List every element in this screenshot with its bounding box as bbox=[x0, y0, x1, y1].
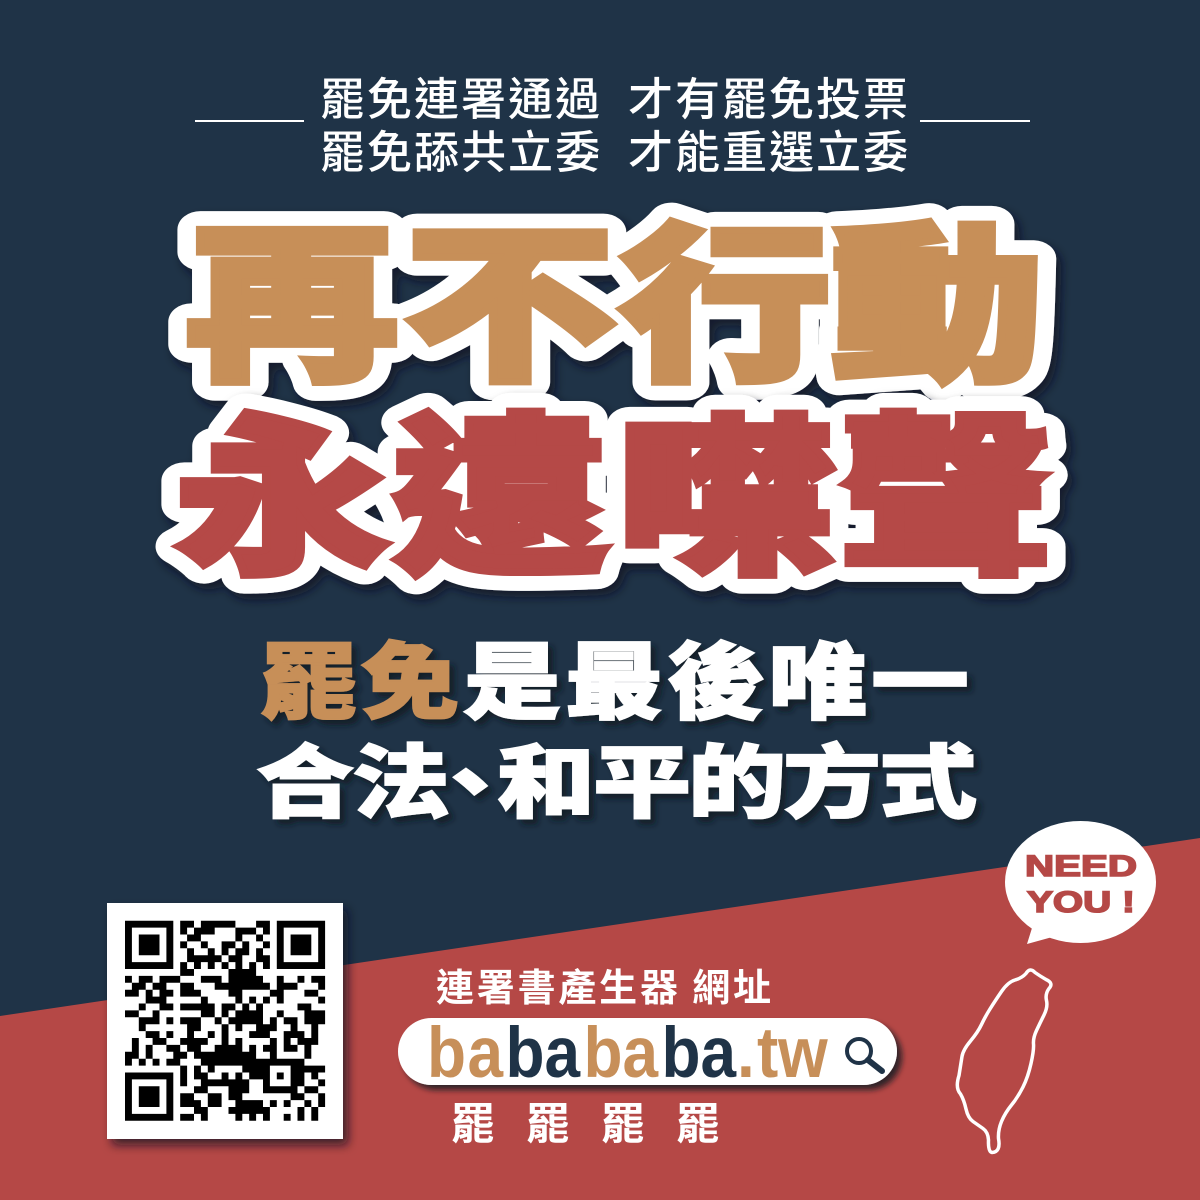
icon: magnifier bbox=[847, 1039, 882, 1071]
pill background bbox=[398, 1018, 897, 1085]
subtitle line 2: 和平的方式 bbox=[497, 718, 977, 834]
headline line 2: 永遠噤聲 bbox=[174, 359, 1054, 609]
repeated recall characters bbox=[451, 1088, 720, 1152]
repeated recall characters: 罷 bbox=[676, 1088, 720, 1152]
repeated recall characters: 罷 bbox=[526, 1088, 570, 1152]
QR code bbox=[107, 903, 343, 1139]
repeated recall characters: 罷 bbox=[451, 1088, 495, 1152]
red diagonal panel bbox=[0, 838, 1200, 1200]
headline line 2: 永遠噤聲 bbox=[174, 359, 1054, 609]
bubble text: YOU ! bbox=[1027, 886, 1135, 919]
icon: Taiwan outline bbox=[957, 970, 1051, 1152]
subtitle bbox=[256, 615, 977, 834]
repeated recall characters: 罷 bbox=[601, 1088, 645, 1152]
slogan line 1: 罷免連署通過 才有罷免投票 bbox=[320, 63, 908, 128]
url search bar bbox=[398, 1014, 897, 1093]
headline line 1: 再不行動 bbox=[186, 170, 1043, 415]
subtitle line 2: 合法 bbox=[256, 718, 450, 834]
bubble text bbox=[1025, 850, 1137, 919]
slogan line 2: 罷免舔共立委 才能重選立委 bbox=[320, 116, 908, 181]
form generator label: 連署書產生器 網址 bbox=[436, 957, 771, 1012]
speech bubble bbox=[1005, 821, 1156, 944]
top slogan bbox=[320, 63, 908, 181]
bubble text: NEED bbox=[1025, 850, 1137, 883]
subtitle line 2: 、 bbox=[421, 718, 519, 834]
url text: babababa.tw bbox=[427, 1014, 828, 1093]
subtitle line 1: 罷免 bbox=[260, 615, 459, 737]
headline line 1: 再不行動 bbox=[186, 170, 1043, 415]
subtitle line 1: 是最後唯一 bbox=[463, 615, 969, 737]
